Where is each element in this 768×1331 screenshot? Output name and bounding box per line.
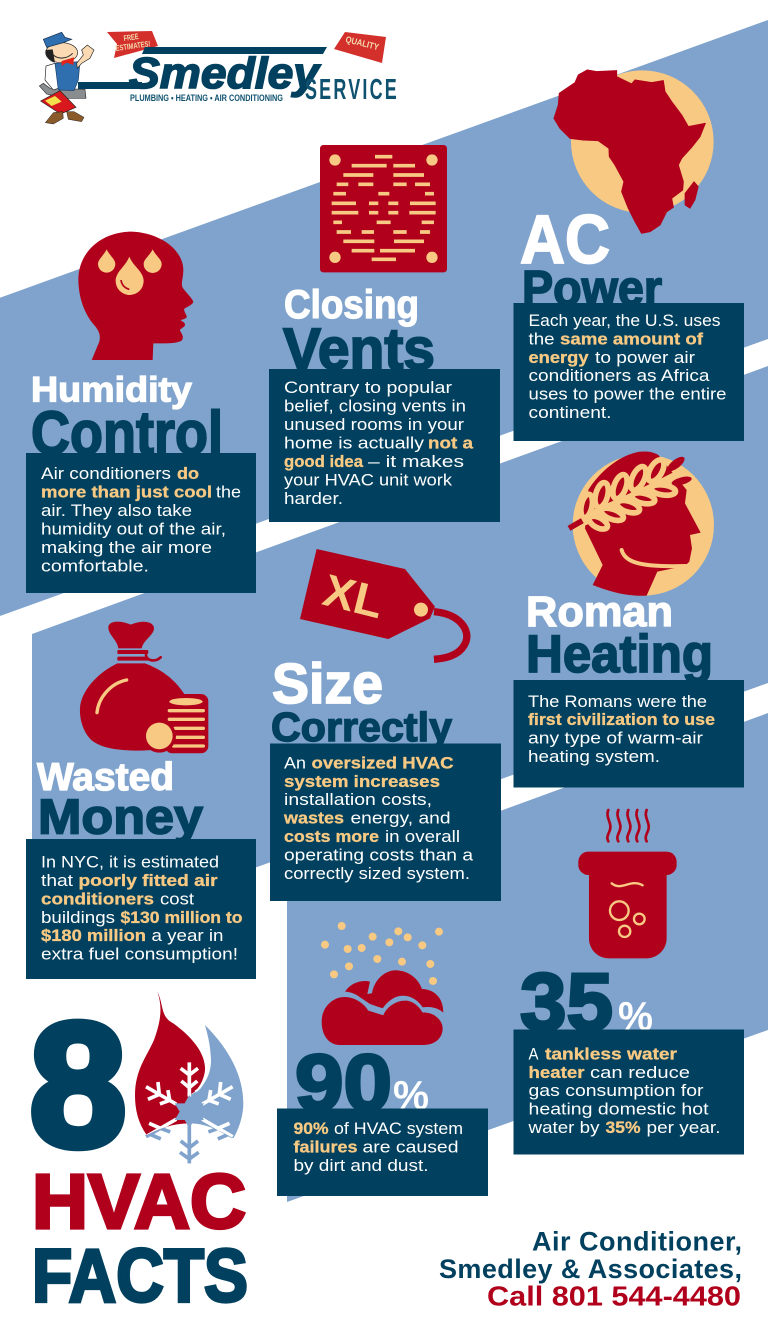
logo wordmark: Smedley: Smedley (129, 49, 322, 98)
mascot plumber (39, 32, 94, 124)
heading: 90: 90 (295, 1038, 392, 1127)
text box: energy (528, 349, 589, 367)
text box: can reduce (590, 1063, 690, 1082)
text box: Each year, the U.S. uses (528, 311, 720, 330)
text box: Contrary to popular (284, 378, 452, 397)
panel: humidity control (26, 232, 256, 593)
text box (277, 1108, 488, 1196)
text box: $180 million (41, 927, 146, 945)
text box: oversized HVAC (312, 754, 454, 772)
logo swoosh lines (78, 47, 327, 89)
text box: heating domestic hot (528, 1100, 709, 1118)
heading: percent sign: % (393, 1072, 429, 1118)
text box: installation costs, (284, 790, 432, 809)
text box: poorly fitted air (78, 872, 218, 890)
text box (26, 453, 256, 593)
text box: same amount of (560, 330, 704, 348)
footer line 3: phone: Call 801 544-4480 (487, 1280, 741, 1312)
text box: are caused (362, 1138, 458, 1156)
heading: Roman: Roman (526, 588, 673, 636)
title: FACTS: FACTS (32, 1234, 248, 1318)
logo tagline: PLUMBING • HEATING • AIR CONDITIONING (130, 93, 283, 104)
text box: air. They also take (41, 501, 192, 520)
text box: Air conditioners (41, 464, 171, 483)
heading: Humidity: Humidity (31, 370, 193, 410)
heading: AC: AC (520, 201, 610, 278)
text box: the (216, 482, 241, 502)
heading: Closing: Closing (284, 283, 419, 327)
text box: cost (160, 890, 194, 908)
heading: Vents: Vents (283, 317, 435, 382)
text box: to power air (595, 348, 695, 367)
text box: uses to power the entire (528, 384, 726, 404)
text box: gas consumption for (528, 1081, 704, 1100)
text box: comfortable. (41, 556, 149, 576)
icon: Roman head with laurel (569, 452, 714, 596)
text box: failures (294, 1138, 358, 1156)
panel: wasted money (26, 622, 256, 979)
heading: Correctly: Correctly (271, 704, 452, 750)
background band: top blue (0, 20, 768, 616)
text box: 90% (294, 1120, 329, 1138)
text box: of HVAC system (334, 1119, 463, 1138)
text box: your HVAC unit work (284, 470, 453, 490)
text box: costs more (284, 828, 379, 846)
icon: flame and snowflake (135, 992, 243, 1163)
text box: any type of warm-air (528, 728, 703, 748)
logo wordmark: Service: SERVICE (305, 74, 397, 106)
icon: XL price tag: XL (318, 564, 389, 628)
background band: middle blue (32, 366, 768, 948)
banner: quality: QUALITY (345, 34, 380, 52)
text box: unused rooms in your (284, 415, 464, 434)
text box: wastes (283, 810, 344, 828)
icon: dust cloud (321, 922, 443, 1045)
icon: head with water drops (78, 232, 193, 360)
text box (514, 1030, 744, 1154)
text box: humidity out of the air, (41, 520, 226, 538)
text box: do (177, 465, 199, 483)
heading: Wasted: Wasted (37, 756, 174, 799)
panel: AC power (514, 70, 744, 441)
heading: Size: Size (272, 652, 383, 716)
text box: heater (528, 1064, 585, 1082)
background band: lower blue (287, 713, 768, 1202)
panel: Roman heating (514, 452, 744, 788)
text box: the (528, 330, 554, 348)
icon: money bag with coins (80, 622, 208, 753)
heading: percent sign: % (618, 993, 653, 1039)
logo: Smedley Service (39, 31, 397, 124)
panel: closing vents (269, 145, 500, 522)
text box: more than just cool (41, 484, 212, 502)
text box: in overall (385, 827, 460, 846)
text box: conditioners as Africa (528, 366, 710, 385)
text box: system increases (284, 773, 440, 791)
title: HVAC: HVAC (32, 1159, 246, 1245)
panel: 90 percent dust (277, 922, 488, 1196)
text box: home is actually (284, 434, 425, 452)
text box: operating costs than a (284, 846, 474, 864)
text box: making the air more (41, 538, 212, 557)
text box: belief, closing vents in (284, 396, 466, 416)
panel: 35 percent tankless (514, 810, 744, 1154)
text box (26, 839, 256, 979)
text box: water by (527, 1118, 600, 1137)
text box: energy, and (350, 808, 450, 828)
title numeral 8: 8 (30, 988, 126, 1184)
text box: per year. (646, 1118, 720, 1137)
banner: quality (334, 32, 386, 63)
text box: In NYC, it is estimated (41, 852, 219, 872)
icon: vent grille (320, 145, 447, 272)
banner: free estimates: FREE (123, 32, 140, 43)
text box: not a (428, 434, 474, 452)
heading: Heating: Heating (526, 625, 713, 684)
footer line 1: Air Conditioner, (532, 1226, 742, 1256)
text box: – it makes (368, 452, 464, 471)
text box (270, 744, 501, 901)
text box: 35% (606, 1119, 641, 1137)
icon: XL price tag (300, 549, 467, 659)
banner: free estimates: ESTIMATES! (115, 39, 151, 53)
icon: Africa on a circle (554, 70, 714, 233)
heading: Control: Control (31, 399, 223, 467)
text box: correctly sized system. (284, 864, 470, 883)
title: 8 HVAC Facts (30, 988, 248, 1318)
text box: conditioners (41, 890, 154, 908)
text box: buildings (41, 908, 115, 927)
banner: free estimates (107, 31, 158, 58)
footer contact block (439, 1226, 742, 1312)
text box (269, 369, 500, 522)
text box: that (41, 871, 73, 890)
heading: Money: Money (38, 790, 203, 844)
footer line 2: Smedley & Associates, (439, 1254, 742, 1284)
text box: The Romans were the (528, 692, 707, 711)
text box (514, 303, 744, 441)
icon: water heater pot (578, 810, 677, 958)
heading: 35: 35 (520, 957, 613, 1048)
text box: good idea (284, 453, 364, 471)
text box: extra fuel consumption! (41, 944, 238, 964)
panel: size correctly (270, 549, 501, 901)
text box: heating system. (528, 747, 660, 766)
text box: harder. (284, 489, 343, 508)
text box: tankless water (545, 1046, 678, 1064)
text box: A (528, 1044, 539, 1064)
text box: $130 million to (120, 909, 242, 927)
text box: An (284, 754, 306, 772)
text box: first civilization to use (528, 711, 715, 729)
text box: continent. (528, 403, 612, 422)
text box (514, 680, 744, 788)
text box: by dirt and dust. (294, 1156, 428, 1175)
heading: Power: Power (522, 262, 662, 316)
text box: a year in (152, 926, 224, 945)
